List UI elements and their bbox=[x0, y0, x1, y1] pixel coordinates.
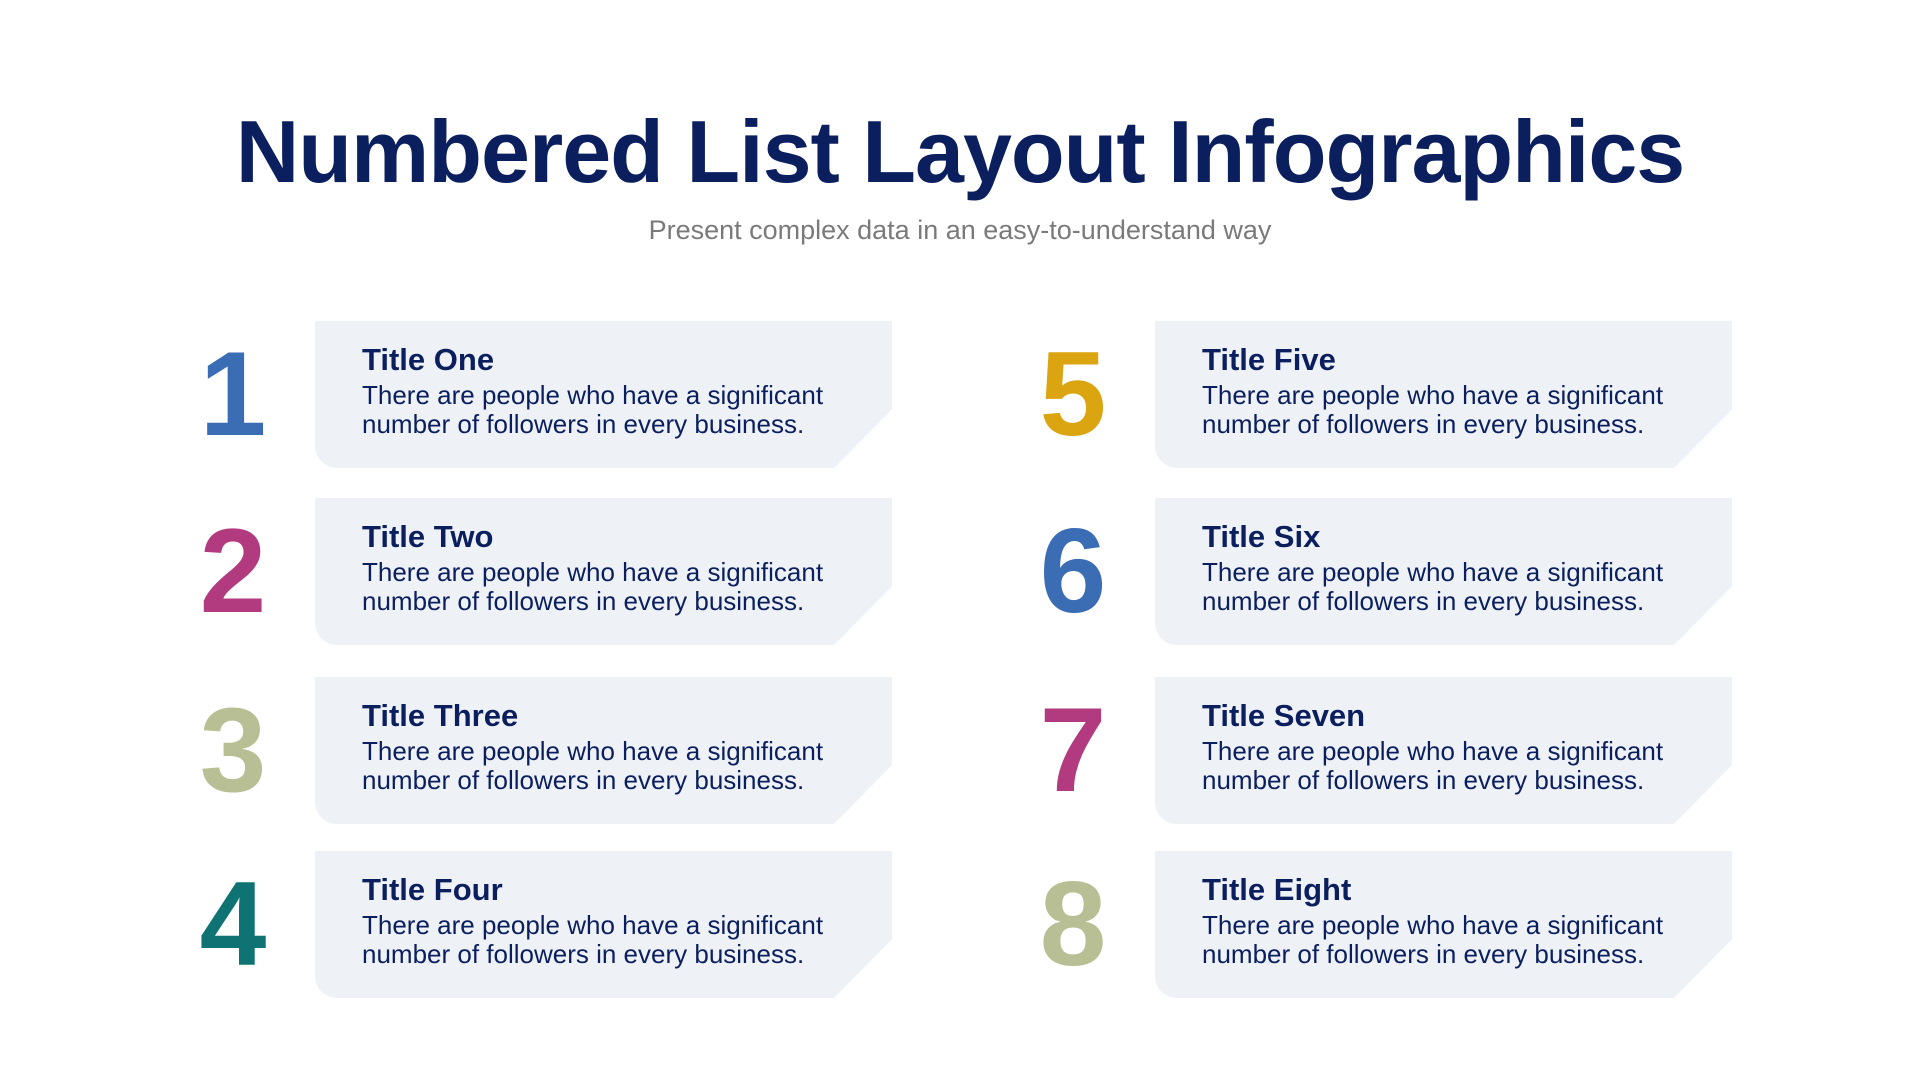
item 5: number of followers in every business. bbox=[1202, 409, 1644, 439]
item 1: 1 bbox=[200, 327, 266, 461]
item 6: There are people who have a significant bbox=[1202, 557, 1663, 587]
item 6: number of followers in every business. bbox=[1202, 586, 1644, 616]
item 7: Title Seven bbox=[1202, 698, 1365, 733]
item 8 bbox=[1040, 851, 1732, 998]
item 6: Title Six bbox=[1202, 519, 1320, 554]
subtitle: Present complex data in an easy-to-understand way bbox=[649, 215, 1271, 245]
item 2 bbox=[200, 498, 892, 645]
item 8: number of followers in every business. bbox=[1202, 939, 1644, 969]
item 2: There are people who have a significant bbox=[362, 557, 823, 587]
item 6: 6 bbox=[1040, 504, 1106, 638]
item 3: Title Three bbox=[362, 698, 518, 733]
item 2: 2 bbox=[200, 504, 266, 638]
item 4: 4 bbox=[200, 857, 266, 991]
item 2: Title Two bbox=[362, 519, 493, 554]
item 1: Title One bbox=[362, 342, 494, 377]
item 5: Title Five bbox=[1202, 342, 1336, 377]
item 7: 7 bbox=[1040, 683, 1106, 817]
item 4 bbox=[200, 851, 892, 998]
item 7: number of followers in every business. bbox=[1202, 765, 1644, 795]
item 1 bbox=[200, 321, 892, 468]
item 1: number of followers in every business. bbox=[362, 409, 804, 439]
item 8: 8 bbox=[1040, 857, 1106, 991]
item 3 bbox=[200, 677, 892, 824]
item 7 bbox=[1040, 677, 1732, 824]
item 8: There are people who have a significant bbox=[1202, 910, 1663, 940]
item 1: There are people who have a significant bbox=[362, 380, 823, 410]
item 6 bbox=[1040, 498, 1732, 645]
item 7: There are people who have a significant bbox=[1202, 736, 1663, 766]
item 2: number of followers in every business. bbox=[362, 586, 804, 616]
item 5 bbox=[1040, 321, 1732, 468]
item 5: 5 bbox=[1040, 327, 1106, 461]
item 8: Title Eight bbox=[1202, 872, 1351, 907]
title: Numbered List Layout Infographics bbox=[236, 102, 1684, 201]
item 3: number of followers in every business. bbox=[362, 765, 804, 795]
item 5: There are people who have a significant bbox=[1202, 380, 1663, 410]
item 3: There are people who have a significant bbox=[362, 736, 823, 766]
item 3: 3 bbox=[200, 683, 266, 817]
item 4: number of followers in every business. bbox=[362, 939, 804, 969]
item 4: There are people who have a significant bbox=[362, 910, 823, 940]
item 4: Title Four bbox=[362, 872, 503, 907]
